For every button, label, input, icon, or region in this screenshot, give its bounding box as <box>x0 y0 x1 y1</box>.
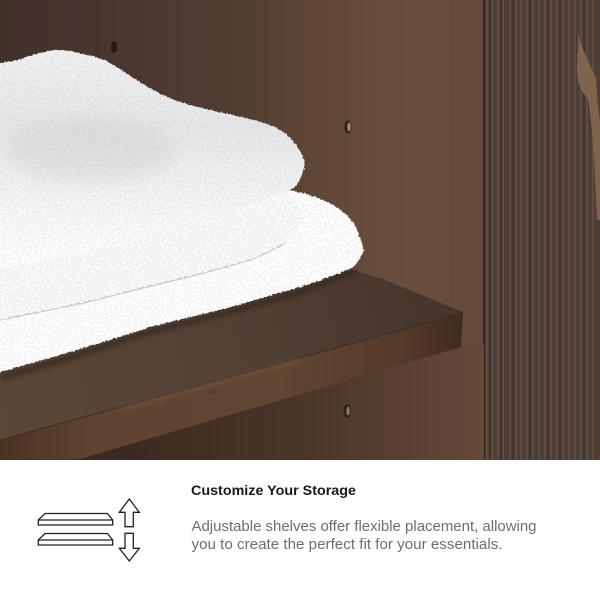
icon: lower shelf <box>38 534 113 545</box>
towels <box>0 50 364 377</box>
description text <box>192 519 536 553</box>
towel contact shadow <box>0 269 360 382</box>
icon: down arrow <box>119 533 139 561</box>
product photo: towels on wooden shelf <box>0 0 600 460</box>
description text: you to create the perfect fit for your essentials. <box>192 537 502 553</box>
shelf support holes <box>111 41 352 418</box>
icon: upper shelf <box>38 514 113 525</box>
shelf <box>0 270 463 460</box>
icon: up arrow <box>119 499 139 527</box>
back panel <box>0 0 484 460</box>
shelf top surface <box>0 270 463 440</box>
towel: middle <box>0 190 302 324</box>
towel: bottom <box>0 190 364 377</box>
towel: top <box>0 49 305 228</box>
wood knot <box>577 33 600 220</box>
heading: Customize Your Storage <box>191 482 356 498</box>
shelf front edge <box>0 313 463 460</box>
cabinet side post <box>483 0 600 460</box>
description text: Adjustable shelves offer flexible placement, allowing <box>192 519 536 535</box>
area beneath shelf <box>70 345 484 460</box>
icon: adjustable shelves with up and down arrows <box>38 499 139 561</box>
white caption panel <box>0 460 600 600</box>
